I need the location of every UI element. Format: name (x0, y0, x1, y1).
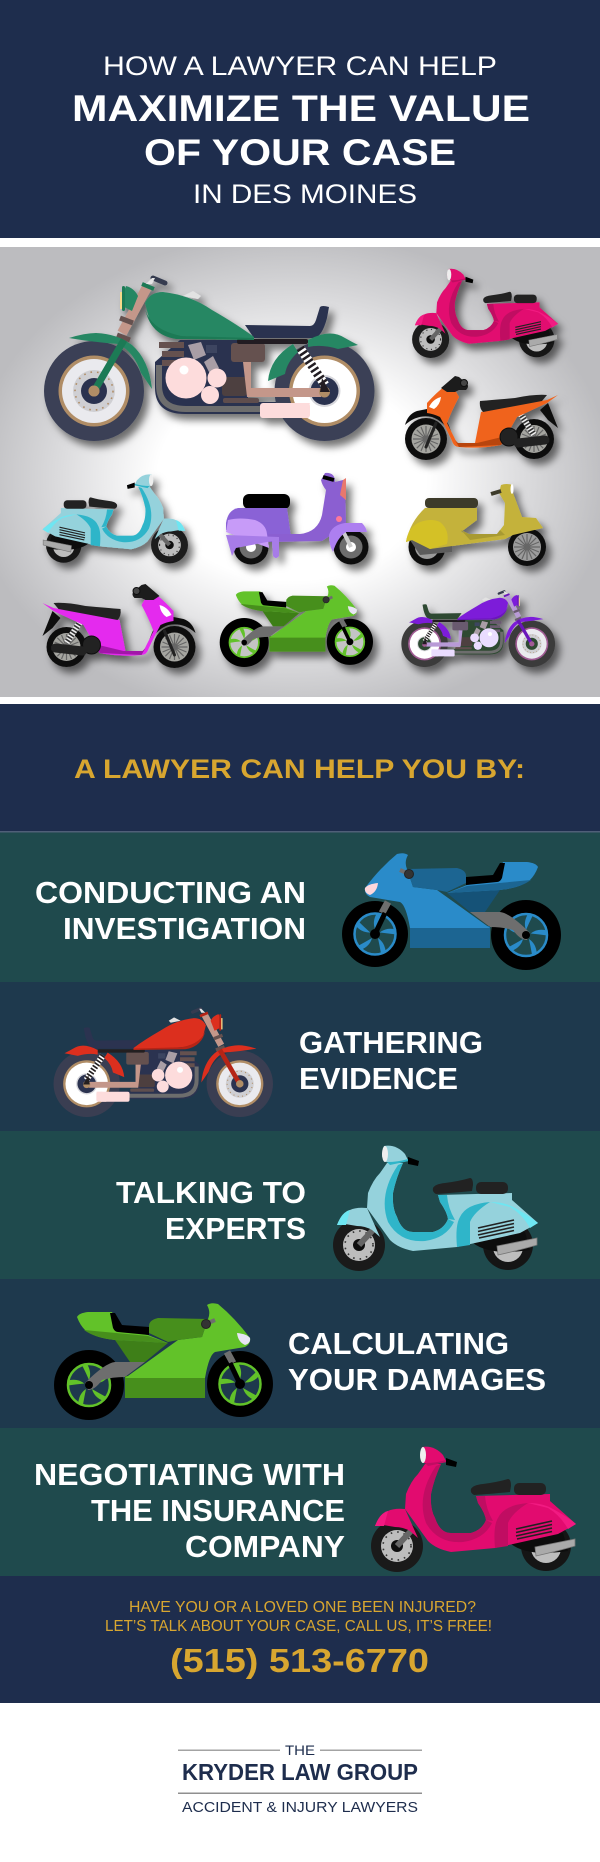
panel: talking to experts (0, 1131, 600, 1279)
icon: yellow scooter (406, 484, 546, 566)
icon: orange moped (405, 376, 558, 460)
panel: header (0, 0, 600, 238)
title: maximize the value of your case (72, 87, 530, 173)
panel: negotiating with the insurance company (0, 1428, 600, 1576)
text: negotiating with the insurance company: NEGOTIATING WITH (34, 1458, 345, 1492)
logo: the kryder law group (178, 1742, 422, 1816)
icon: pink scooter (371, 1447, 576, 1572)
phone number: (515) 513-6770 (170, 1643, 429, 1680)
logo: the kryder law group: THE (285, 1742, 315, 1758)
panel: motorcycle collection image (0, 247, 600, 697)
logo: the kryder law group: KRYDER LAW GROUP (182, 1759, 418, 1785)
text: talking to experts: TALKING TO (116, 1176, 306, 1210)
heading: a lawyer can help you by: A LAWYER CAN HELP YOU BY: (74, 754, 525, 784)
text: call to action: HAVE YOU OR A LOVED ONE BEEN INJURED? (129, 1599, 476, 1616)
icon: small purple cruiser (401, 591, 555, 667)
text: calculating your damages: CALCULATING (288, 1327, 509, 1361)
icon: pink scooter (412, 269, 558, 358)
icon: teal scooter (42, 474, 188, 563)
icon: red cruiser motorcycle (54, 1009, 273, 1117)
title line: in des moines: IN DES MOINES (193, 179, 417, 209)
text: gathering evidence: EVIDENCE (299, 1062, 458, 1096)
icon: purple scooter (226, 473, 368, 564)
panel: section heading band (0, 704, 600, 832)
panel: gathering evidence (0, 982, 600, 1131)
icon: teal scooter (333, 1146, 538, 1271)
icon: small green sport bike (220, 585, 373, 667)
panel: conducting an investigation (0, 831, 600, 982)
text: calculating your damages: YOUR DAMAGES (288, 1363, 546, 1397)
title: maximize the value of your case: OF YOUR CASE (144, 131, 456, 173)
icon: green sport bike (54, 1303, 273, 1420)
text: call to action: LET’S TALK ABOUT YOUR CASE, CALL US, IT’S FREE! (105, 1618, 492, 1635)
panel: calculating your damages (0, 1279, 600, 1428)
panel: call to action footer (0, 1576, 600, 1703)
text: call to action (105, 1599, 492, 1635)
text: calculating your damages (288, 1327, 546, 1397)
icon: magenta moped (42, 584, 196, 668)
text: talking to experts (116, 1176, 306, 1246)
icon: blue sport bike (342, 853, 561, 970)
text: conducting an investigation (35, 876, 306, 946)
text: conducting an investigation: INVESTIGATION (63, 912, 306, 946)
text: negotiating with the insurance company: THE INSURANCE (91, 1494, 345, 1528)
logo: the kryder law group: ACCIDENT & INJURY LAWYERS (182, 1800, 418, 1816)
text: talking to experts: EXPERTS (165, 1212, 306, 1246)
title: maximize the value of your case: MAXIMIZE THE VALUE (72, 87, 530, 129)
text: conducting an investigation: CONDUCTING AN (35, 876, 306, 910)
text: gathering evidence: GATHERING (299, 1026, 483, 1060)
text: negotiating with the insurance company (34, 1458, 345, 1564)
text: negotiating with the insurance company: COMPANY (185, 1530, 345, 1564)
text: gathering evidence (299, 1026, 483, 1096)
icon: large green cruiser motorcycle (44, 278, 374, 441)
title line: how a lawyer can help: HOW A LAWYER CAN HELP (103, 51, 497, 81)
